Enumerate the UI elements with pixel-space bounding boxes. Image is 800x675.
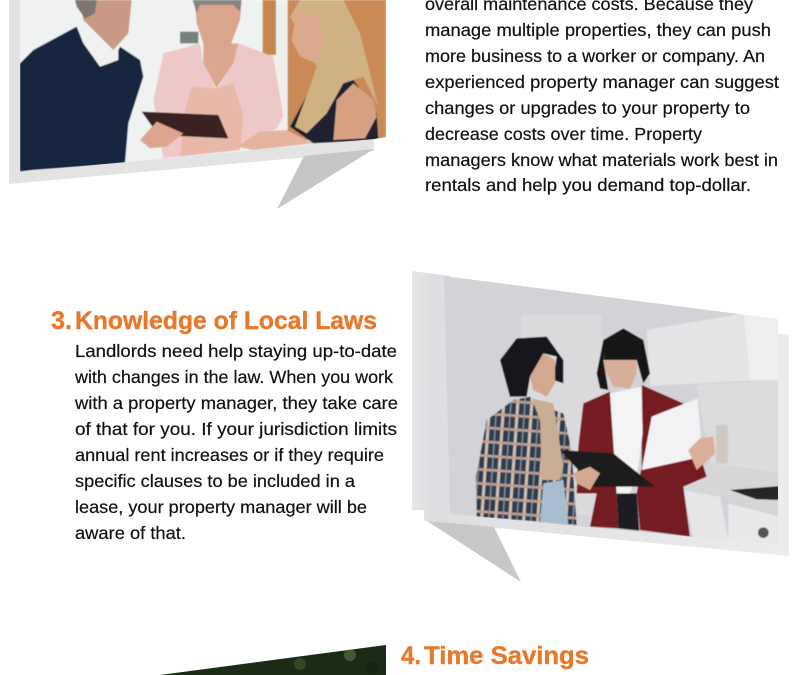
photo: two women reading documents in a kitchen — [433, 270, 780, 550]
heading: 4. Time Savings: Time Savings — [424, 642, 589, 670]
panel: photo callout middle right — [412, 270, 789, 582]
heading: 3. Knowledge of Local Laws: 3. — [51, 307, 72, 335]
speech frame — [9, 0, 374, 184]
photo: garden foliage, cropped — [160, 645, 386, 675]
text block: local laws paragraph: specific clauses to be included in a — [75, 471, 355, 491]
heading: 3. Knowledge of Local Laws: Knowledge of Local Laws — [75, 307, 377, 335]
text block: maintenance cost paragraph — [425, 0, 779, 195]
photo: three people reviewing a tablet — [20, 0, 387, 175]
text block: local laws paragraph: aware of that. — [75, 523, 186, 543]
text block: maintenance cost paragraph: decrease costs over time. Property — [425, 124, 702, 144]
text block: local laws paragraph: annual rent increases or if they require — [75, 445, 384, 465]
heading: 4. Time Savings: 4. — [401, 642, 421, 670]
text block: maintenance cost paragraph: more business to a worker or company. An — [425, 46, 765, 66]
text block: local laws paragraph: with a property manager, they take care — [74, 393, 398, 413]
panel: photo callout top left — [9, 0, 387, 209]
speech frame — [412, 271, 789, 556]
text block: maintenance cost paragraph: managers know what materials work best in — [425, 150, 778, 170]
speech tail — [277, 149, 374, 209]
text block: maintenance cost paragraph: manage multiple properties, they can push — [425, 20, 771, 40]
text block: local laws paragraph — [74, 341, 398, 543]
text block: maintenance cost paragraph: experienced property manager can suggest — [425, 72, 779, 92]
text block: local laws paragraph: of that for you. If your jurisdiction limits — [75, 419, 397, 439]
text block: maintenance cost paragraph: rentals and help you demand top-dollar. — [425, 175, 751, 195]
text block: maintenance cost paragraph: changes or upgrades to your property to — [425, 98, 750, 118]
speech tail — [427, 521, 521, 582]
text block: local laws paragraph: with changes in the law. When you work — [74, 367, 393, 387]
text block: local laws paragraph: Landlords need help staying up-to-date — [75, 341, 397, 361]
text block: local laws paragraph: lease, your property manager will be — [75, 497, 367, 517]
